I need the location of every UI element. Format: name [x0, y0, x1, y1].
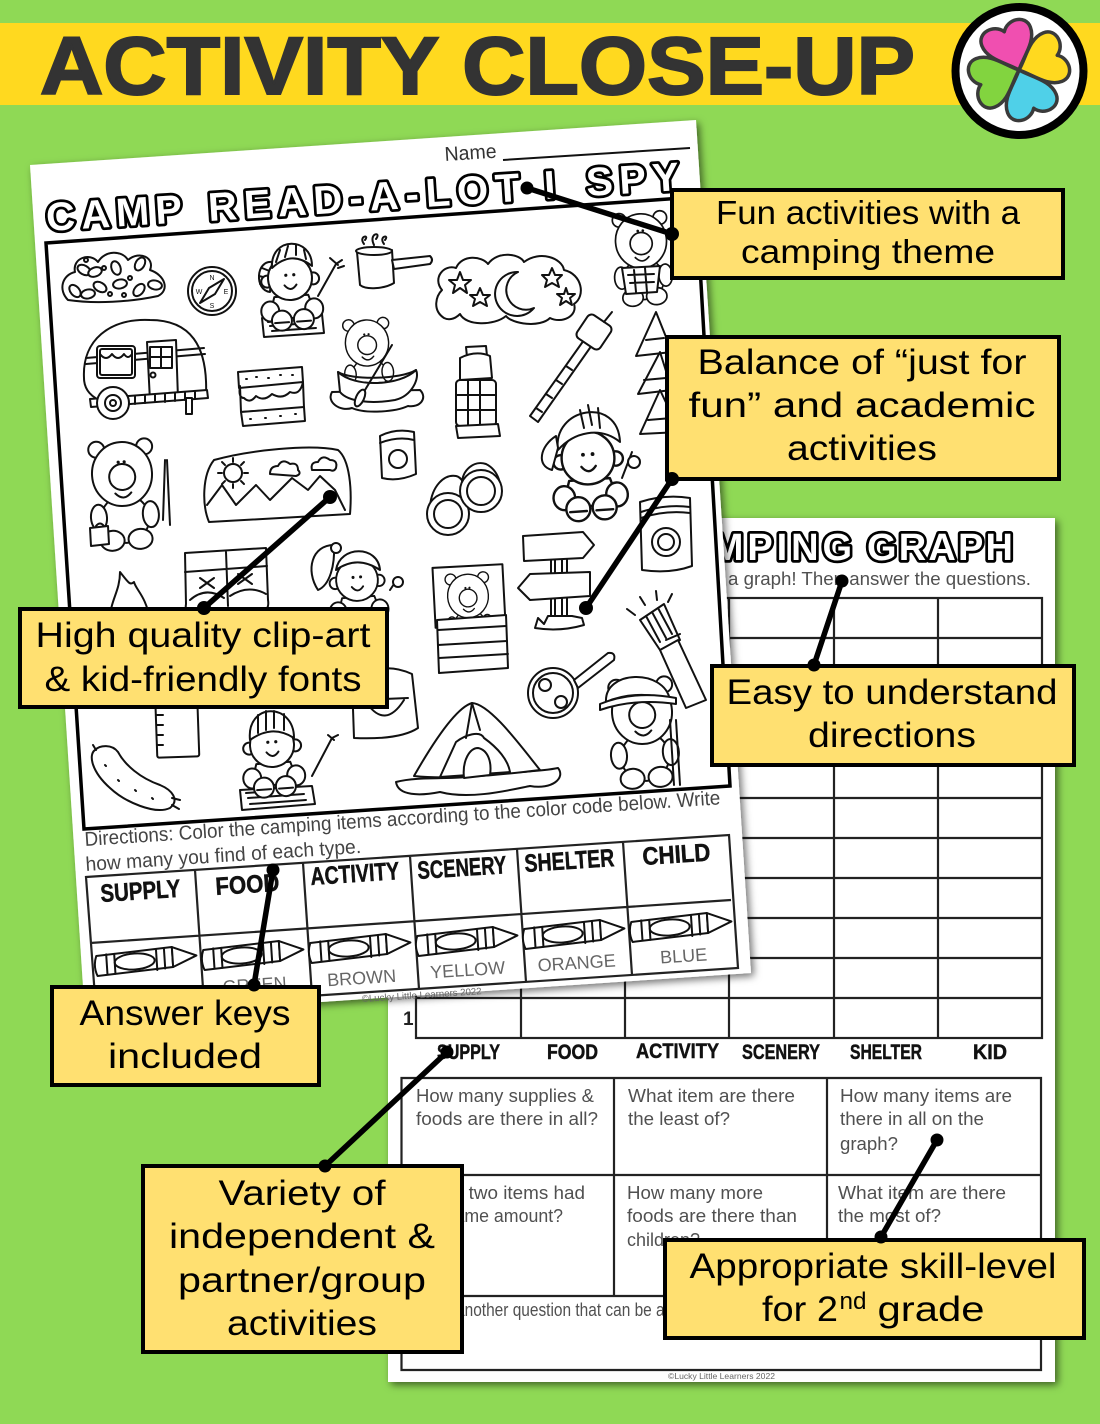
worksheet heading: camping graph: GRAPH — [867, 527, 1013, 569]
name field — [444, 141, 690, 166]
bar graph grid — [416, 598, 1042, 1038]
title: ACTIVITY CLOSE-UP — [40, 21, 915, 112]
question table — [401, 1078, 1041, 1370]
icon: clover logo — [956, 7, 1084, 135]
callout: directions — [712, 666, 1074, 765]
crayons — [94, 911, 732, 976]
question table: foods are there in all? — [416, 1108, 598, 1129]
bear with net — [610, 210, 674, 307]
callout: clip-art: High quality clip-art — [36, 616, 371, 655]
backpack — [352, 668, 418, 738]
mountain scene — [204, 448, 351, 522]
boy with cap — [542, 405, 640, 523]
callout: skill level: Appropriate skill-level — [690, 1247, 1056, 1286]
pine tree — [636, 312, 680, 434]
color names: BROWN — [327, 966, 397, 990]
question table: foods are there than — [627, 1205, 797, 1226]
camper trailer — [84, 320, 208, 419]
color names: ORANGE — [537, 950, 616, 976]
category labels: SUPPLY — [100, 875, 181, 908]
graph axis labels: SCENERY — [742, 1041, 820, 1064]
callout: variety — [143, 1166, 462, 1352]
boots — [185, 548, 268, 616]
callout: variety: Variety of — [218, 1174, 386, 1213]
question table: the least of? — [628, 1108, 730, 1129]
question table: the same amount? — [416, 1205, 563, 1226]
spice jar — [380, 431, 416, 479]
panel: camping graph worksheet — [388, 518, 1055, 1382]
callout: clip-art: & kid-friendly fonts — [44, 660, 362, 699]
arrow: variety — [318, 1046, 454, 1172]
s'more — [238, 367, 305, 426]
title banner — [0, 23, 1100, 105]
arrow: camping theme — [520, 182, 679, 241]
binoculars — [427, 463, 502, 535]
callout: balance: Balance of “just for — [698, 343, 1027, 382]
tent — [396, 703, 560, 795]
category labels: SCENERY — [417, 851, 507, 885]
bush — [62, 253, 165, 302]
color names: YELLOW — [430, 958, 506, 982]
bear fishing — [86, 438, 170, 552]
pickle — [92, 745, 180, 810]
category labels: ACTIVITY — [310, 857, 400, 891]
callout: variety: independent & — [169, 1217, 435, 1256]
callout: variety: partner/group — [178, 1261, 426, 1300]
category labels: FOOD — [215, 869, 280, 901]
night cloud — [436, 255, 581, 324]
arrow: clip-art — [197, 490, 337, 615]
callout: balance: activities — [787, 429, 937, 468]
directions text: Directions: Color the camping items according to the color code below. Write — [84, 787, 721, 851]
callout: answer keys — [52, 987, 319, 1085]
question table: How many items are — [840, 1085, 1012, 1106]
directions text: how many you find of each type. — [85, 836, 362, 876]
copyright: ©Lucky Little Learners 2022 — [668, 1371, 775, 1381]
compass: S — [210, 303, 215, 310]
callout: skill level: nd — [840, 1288, 866, 1315]
question table: What item are there — [838, 1182, 1006, 1203]
arrow: skill level — [874, 1134, 944, 1244]
worksheet copyright: ©Lucky Little Learners 2022 — [361, 986, 482, 1005]
boy on log — [240, 711, 338, 810]
graph directions: a graph! Then answer the questions. — [728, 568, 1031, 589]
color code table — [86, 835, 738, 1010]
compass: W — [196, 289, 203, 296]
bear in sleeping bag — [432, 564, 508, 673]
question table: What item are there — [628, 1085, 795, 1106]
category labels: CHILD — [642, 839, 711, 871]
graph axis labels: KID — [973, 1041, 1007, 1064]
tomato jar — [640, 497, 692, 571]
question table: Write another question that can be answered from the graph. — [416, 1299, 832, 1320]
callout: balance: fun” and academic — [688, 386, 1036, 425]
bear hiker — [600, 676, 681, 790]
callout: answer keys: included — [108, 1037, 262, 1076]
worksheet heading: camp read-a-lot I spy: CAMP — [45, 187, 183, 240]
lantern — [456, 346, 500, 438]
worksheet heading: camp read-a-lot I spy: SPY — [585, 155, 681, 205]
callout: directions: directions — [808, 716, 976, 755]
category labels: SHELTER — [524, 844, 615, 878]
category labels — [100, 839, 711, 908]
graph axis labels — [437, 1040, 1007, 1064]
compass: E — [224, 289, 229, 296]
callout: clip-art — [20, 609, 387, 707]
callout: fun activities: camping theme — [741, 233, 995, 270]
worksheet heading: camp read-a-lot I spy: READ-A-LOT — [207, 166, 521, 230]
callout: fun activities — [672, 190, 1063, 278]
color names: GREEN — [222, 973, 287, 997]
callout: answer keys: Answer keys — [80, 994, 290, 1033]
girl on log — [258, 244, 344, 337]
campfire — [110, 572, 150, 620]
callout: skill level: grade — [878, 1290, 984, 1329]
arrow: directions — [808, 574, 848, 672]
trail signs — [518, 532, 594, 629]
worksheet heading: camp read-a-lot I spy: I — [543, 163, 557, 208]
question table: How many supplies & — [416, 1085, 595, 1106]
graph axis number: 1 — [403, 1009, 414, 1030]
ruler — [155, 689, 199, 758]
name field: Name — [444, 141, 497, 166]
color names — [222, 944, 708, 997]
color names: BLUE — [659, 944, 708, 968]
picture frame — [46, 197, 730, 829]
question table: there in all on the — [840, 1108, 984, 1129]
frying pan — [528, 653, 614, 718]
graph axis labels: SHELTER — [850, 1041, 922, 1064]
clip-art group — [62, 210, 706, 810]
graph axis labels: ACTIVITY — [636, 1040, 719, 1063]
arrow: balance — [579, 472, 679, 615]
worksheet heading: camping graph: CAMPING — [649, 527, 852, 569]
arrow: answer keys — [248, 864, 280, 992]
question table: How many more — [627, 1182, 763, 1203]
directions text — [84, 787, 721, 876]
worksheet heading: camp read-a-lot I spy — [45, 155, 681, 240]
callout: skill level — [665, 1240, 1084, 1338]
callout: balance — [667, 337, 1059, 479]
panel: I spy worksheet — [30, 120, 751, 1018]
callout: fun activities: Fun activities with a — [716, 194, 1021, 231]
question table: children? — [627, 1229, 700, 1250]
girl with pigtail — [311, 543, 403, 631]
callout: variety: activities — [227, 1304, 377, 1343]
question table: the most of? — [838, 1205, 941, 1226]
question table: graph? — [840, 1133, 898, 1154]
worksheet heading: camping graph — [649, 527, 1013, 569]
marshmallow on stick — [530, 312, 613, 422]
flashlight — [627, 591, 706, 708]
graph axis labels: FOOD — [547, 1041, 598, 1064]
callout: directions: Easy to understand — [726, 673, 1058, 712]
callout: skill level: for 2 — [762, 1290, 838, 1329]
graph axis labels: SUPPLY — [437, 1041, 500, 1064]
compass: N — [209, 275, 215, 282]
steaming pot — [356, 234, 432, 288]
compass — [188, 267, 236, 315]
bear in canoe — [331, 317, 423, 412]
arrows: connector lines — [197, 182, 944, 1244]
question table: Which two items had — [411, 1182, 585, 1203]
